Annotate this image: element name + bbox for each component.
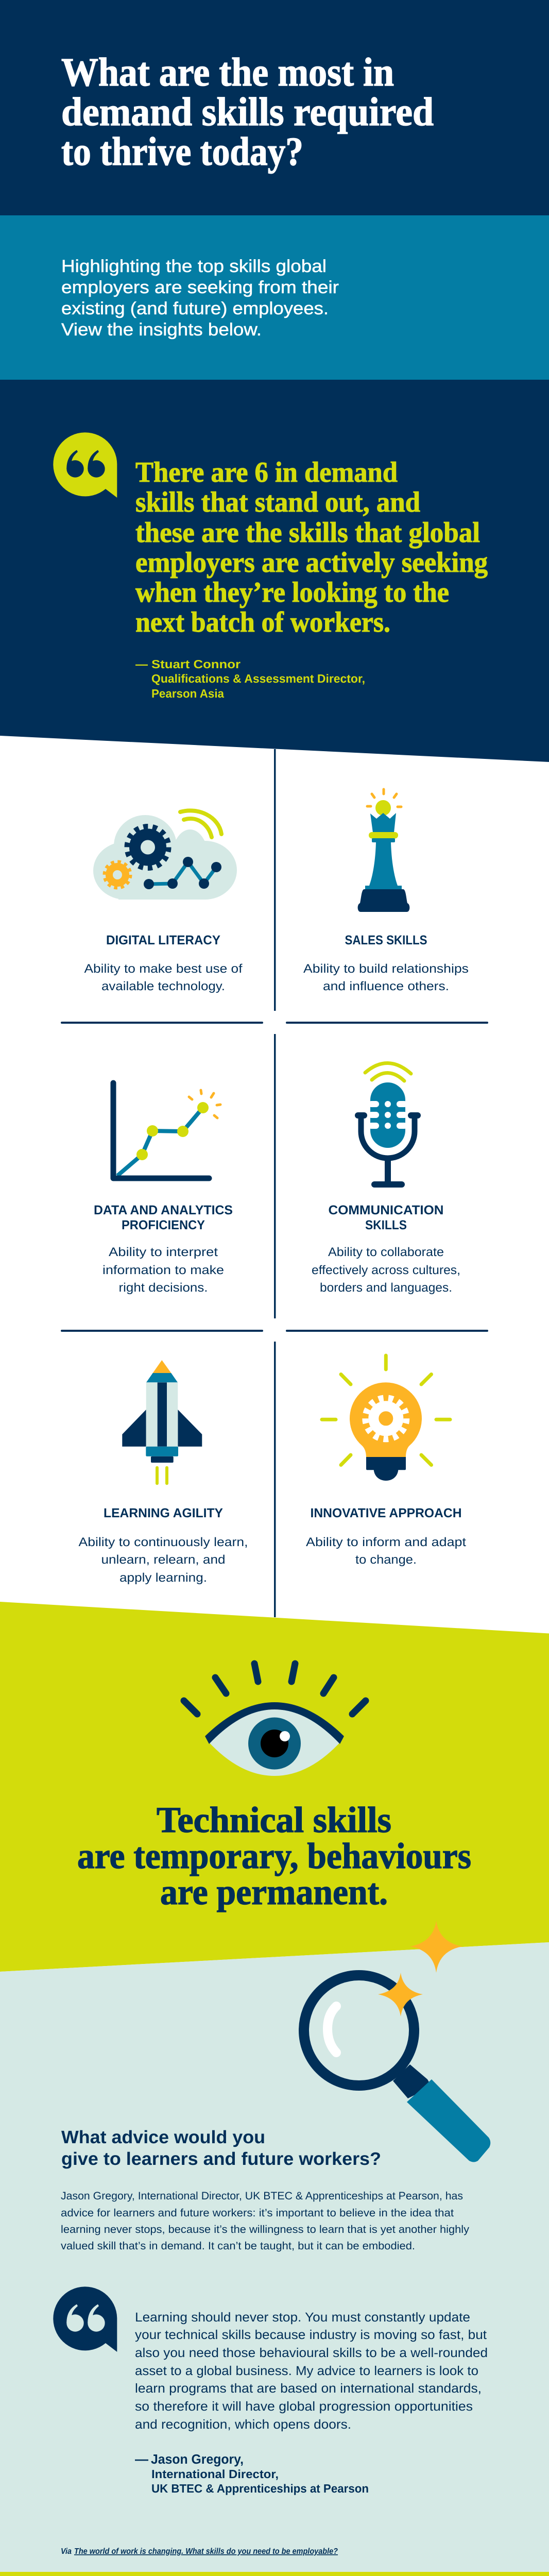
statement heading: are temporary, behaviours [77, 1836, 471, 1876]
pull quote text: these are the skills that global [135, 517, 480, 549]
quote text: also you need those behavioural skills to be a well-rounded [135, 2346, 488, 2360]
description [312, 1245, 460, 1295]
skill: digital literacy [84, 810, 243, 993]
description: and influence others. [323, 979, 449, 993]
heading: LEARNING AGILITY [104, 1506, 223, 1520]
description: Ability to collaborate [328, 1245, 444, 1259]
pull quote text: next batch of workers. [135, 606, 390, 638]
intro text: employers are seeking from their [61, 278, 339, 297]
pull quote text [135, 456, 488, 638]
description: Ability to continuously learn, [78, 1535, 248, 1549]
heading: PROFICIENCY [122, 1218, 205, 1232]
quote text: asset to a global business. My advice to learners is look to [135, 2364, 478, 2378]
pull quote text: employers are actively seeking [135, 547, 488, 579]
quote attribution: UK BTEC & Apprenticeships at Pearson [151, 2482, 369, 2495]
panel: intro band [0, 215, 549, 380]
quote attribution: — [135, 657, 148, 671]
skill: innovative approach [306, 1355, 466, 1567]
title: demand skills required [61, 89, 434, 134]
description: apply learning. [119, 1571, 207, 1585]
icon: rocket [122, 1360, 202, 1485]
heading [329, 1203, 444, 1232]
intro text: Highlighting the top skills global [61, 257, 327, 276]
heading: COMMUNICATION [329, 1203, 444, 1217]
icon: light bulb with gear [322, 1355, 450, 1481]
description: Ability to inform and adapt [306, 1535, 466, 1549]
icon: lime quote bubble [53, 432, 117, 498]
quote text [135, 2310, 488, 2432]
title: to thrive today? [61, 129, 303, 174]
advice heading [61, 2127, 381, 2169]
description: Ability to build relationships [303, 962, 469, 976]
icon: cloud with gears [93, 810, 237, 900]
heading [94, 1203, 233, 1232]
pull quote text: There are 6 in demand [135, 456, 398, 488]
skill: communication skills [312, 1063, 460, 1295]
heading: DIGITAL LITERACY [106, 933, 220, 947]
intro paragraph: learning never stops, because it’s the willingness to learn that is yet another highly [61, 2224, 470, 2235]
advice heading: give to learners and future workers? [61, 2149, 381, 2169]
description: available technology. [101, 979, 225, 993]
quote attribution [135, 657, 365, 700]
skill: learning agility [78, 1360, 248, 1585]
panel: stuart connor quote [0, 380, 549, 762]
quote text: and recognition, which opens doors. [135, 2417, 351, 2432]
description [306, 1535, 466, 1567]
statement heading: are permanent. [160, 1872, 388, 1912]
quote attribution: Stuart Connor [151, 657, 241, 671]
quote attribution: Pearson Asia [151, 687, 224, 700]
skill: data and analytics proficiency [94, 1083, 233, 1295]
pull quote text: when they’re looking to the [135, 577, 449, 608]
advice heading: What advice would you [61, 2127, 265, 2147]
source credit: The world of work is changing. What skills do you need to be employable? [74, 2547, 338, 2556]
quote attribution: International Director, [151, 2467, 279, 2481]
intro paragraph: Jason Gregory, International Director, UK BTEC & Apprenticeships at Pearson, has [61, 2190, 463, 2202]
heading: SKILLS [365, 1218, 407, 1232]
intro text: View the insights below. [61, 320, 262, 340]
description: effectively across cultures, [312, 1263, 460, 1277]
heading: SALES SKILLS [345, 933, 427, 947]
description [102, 1245, 224, 1295]
quote text: your technical skills because industry is moving so fast, but [135, 2328, 487, 2342]
description [303, 962, 469, 993]
icon: eye with lashes [184, 1664, 366, 1776]
intro paragraph: valued skill that’s in demand. It can’t be taught, but it can be embodied. [61, 2240, 415, 2252]
title: What are the most in [61, 49, 394, 94]
description: unlearn, relearn, and [101, 1553, 226, 1567]
statement heading: Technical skills [157, 1800, 391, 1840]
description: information to make [102, 1263, 224, 1277]
quote text: Learning should never stop. You must constantly update [135, 2310, 470, 2325]
title [61, 49, 434, 174]
description: to change. [355, 1553, 417, 1567]
description: borders and languages. [320, 1281, 452, 1295]
quote text: so therefore it will have global progression opportunities [135, 2399, 473, 2414]
quote text: learn programs that are based on international standards, [135, 2381, 482, 2396]
heading: INNOVATIVE APPROACH [310, 1506, 461, 1520]
panel: footer [0, 2572, 549, 2576]
description: right decisions. [118, 1281, 208, 1295]
intro paragraph [61, 2190, 470, 2252]
icon: microphone [355, 1063, 421, 1188]
intro paragraph: advice for learners and future workers: it’s important to believe in the idea that [61, 2207, 454, 2219]
pull quote text: skills that stand out, and [135, 486, 420, 518]
panel: title header [0, 0, 549, 215]
panel: technical skills statement [0, 1602, 549, 1972]
intro text [61, 257, 339, 340]
statement heading [77, 1800, 471, 1912]
icon: navy quote bubble [53, 2286, 117, 2352]
description: Ability to make best use of [84, 962, 243, 976]
panel: six skills grid [61, 749, 488, 1617]
description [78, 1535, 248, 1585]
heading: DATA AND ANALYTICS [94, 1203, 233, 1217]
panel: advice section [0, 1921, 549, 2572]
description: Ability to interpret [109, 1245, 218, 1259]
icon: line chart [113, 1083, 220, 1178]
quote attribution: Jason Gregory, [151, 2451, 244, 2467]
quote attribution [135, 2451, 369, 2495]
icon: magnifying glass with sparkles [304, 1921, 490, 2162]
intro text: existing (and future) employees. [61, 299, 329, 318]
icon: chess queen [358, 789, 409, 912]
skill: sales skills [303, 789, 469, 993]
quote attribution: Qualifications & Assessment Director, [151, 672, 365, 685]
quote attribution: — [135, 2451, 148, 2467]
description [84, 962, 243, 993]
source credit: Via [61, 2547, 72, 2556]
